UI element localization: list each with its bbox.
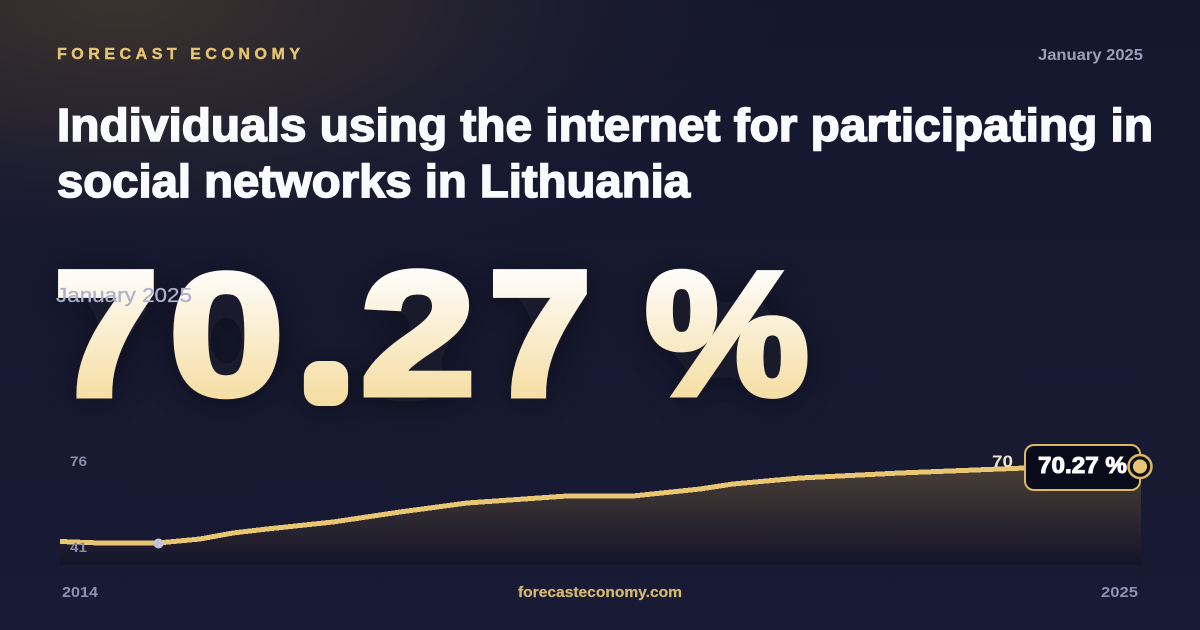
date top right: January 2025 xyxy=(1038,47,1143,64)
y axis min label: 41 xyxy=(70,539,87,555)
last value axis label: 70 xyxy=(992,452,1013,471)
big value: 7 xyxy=(490,235,590,431)
end marker xyxy=(1128,455,1152,478)
title: social networks in Lithuania xyxy=(57,155,690,207)
big value: 0 xyxy=(168,237,285,432)
start year: 2014 xyxy=(62,584,99,601)
y axis max label: 76 xyxy=(70,453,87,469)
big value: . xyxy=(312,301,340,413)
end year: 2025 xyxy=(1101,584,1138,601)
big value: % xyxy=(645,237,809,432)
big value xyxy=(55,235,809,432)
chart area fill xyxy=(60,466,1141,565)
value callout xyxy=(1025,445,1140,490)
date overlapping value: January 2025 xyxy=(56,284,192,307)
big value: 7 xyxy=(55,237,157,432)
title xyxy=(57,99,1153,207)
title: Individuals using the internet for participating in xyxy=(57,99,1153,151)
start marker xyxy=(154,538,164,548)
area chart xyxy=(60,466,1141,565)
source url: forecasteconomy.com xyxy=(518,585,682,601)
chart line xyxy=(60,466,1141,543)
brand label: FORECAST ECONOMY xyxy=(57,46,300,63)
big value: 2 xyxy=(361,236,475,431)
value callout: 70.27 % xyxy=(1038,452,1127,478)
